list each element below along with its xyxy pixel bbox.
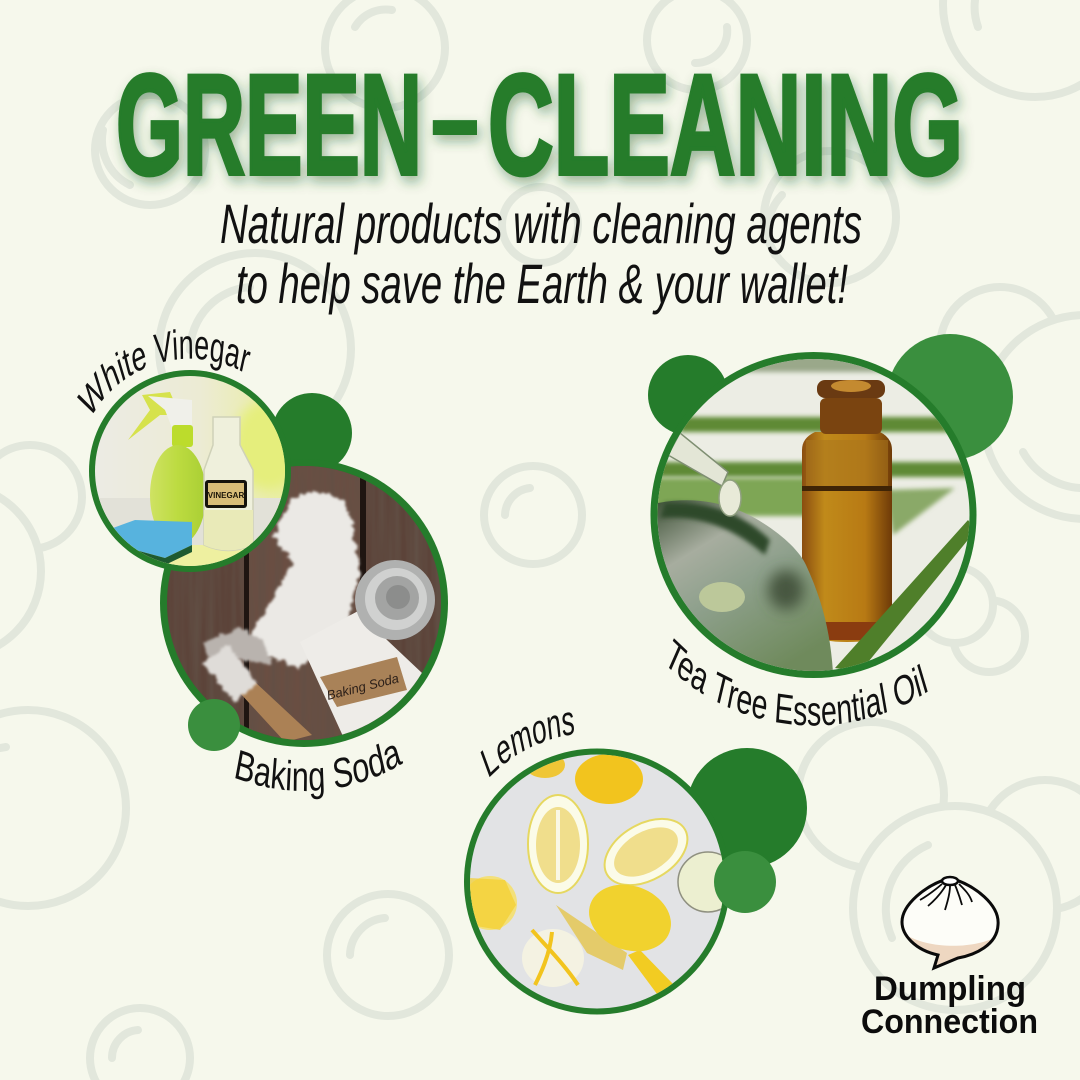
- icon: dumpling: [900, 877, 1000, 975]
- subtitle: [220, 192, 862, 315]
- label: lemons: Lemons: [480, 712, 574, 778]
- brand name: Connection: [861, 1003, 1038, 1041]
- accent circle: tea tree light: [887, 334, 1013, 460]
- panel: white vinegar photo: VINEGAR: [208, 491, 244, 500]
- accent circle: lemons light: [714, 851, 776, 913]
- panel: baking soda photo: Baking Soda: [325, 671, 400, 703]
- label: white vinegar: White Vinegar: [77, 329, 251, 414]
- panel: white vinegar photo: [89, 370, 303, 575]
- title: -: [426, 48, 484, 187]
- title: GREEN: [116, 46, 422, 205]
- panel: tea tree essential oil photo: [650, 350, 980, 680]
- brand name: [861, 970, 1038, 1041]
- title: [116, 46, 963, 205]
- accent circle: lemons dark: [687, 748, 807, 868]
- brand name: Dumpling: [874, 970, 1026, 1008]
- label: baking soda: Baking Soda: [235, 744, 404, 800]
- logo: dumpling connection: [861, 877, 1038, 1041]
- label: tea tree essential oil: Tea Tree Essential Oil: [669, 638, 928, 726]
- panel: lemons photo: [460, 745, 738, 1020]
- panel: baking soda photo: [160, 459, 450, 750]
- accent circle: baking soda small: [188, 699, 240, 751]
- accent circle: baking soda dark: [272, 393, 352, 473]
- accent circle: tea tree dark: [648, 355, 728, 435]
